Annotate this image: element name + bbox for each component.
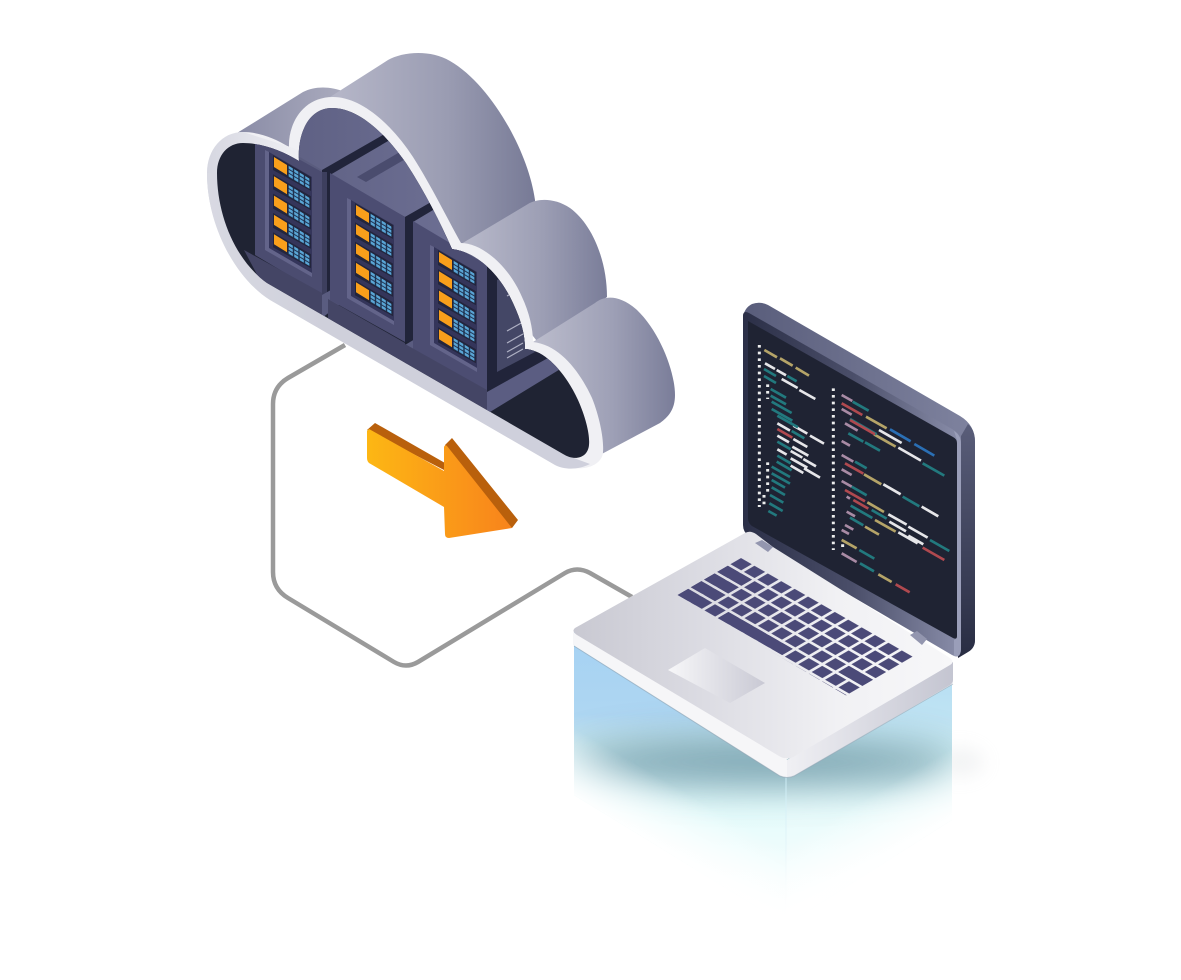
laptop screen xyxy=(743,303,975,658)
gold code tokens xyxy=(764,350,896,582)
blue code tokens xyxy=(890,429,934,456)
cloud with servers xyxy=(200,53,675,470)
server 2 xyxy=(328,137,480,365)
laptop base top deck xyxy=(573,532,952,758)
line numbers xyxy=(759,345,843,550)
server 3 side panel with vent lines xyxy=(497,279,535,372)
cloud front rim xyxy=(207,97,603,469)
shadow to the right of the glow box xyxy=(936,747,984,777)
illustration: cloud servers connected to laptop xyxy=(207,53,975,880)
white code tokens xyxy=(765,363,938,544)
server 3 xyxy=(405,210,559,412)
screen bezel xyxy=(743,312,961,656)
cloud interior with server racks xyxy=(217,108,590,458)
teal code tokens xyxy=(764,369,949,571)
laptop xyxy=(573,303,975,778)
server 1 xyxy=(244,92,395,318)
cloud depth lobes xyxy=(237,53,675,456)
connecting cable xyxy=(273,345,632,666)
screen back rim xyxy=(743,303,975,658)
orange download arrow xyxy=(367,423,518,538)
glow box under laptop xyxy=(574,632,952,880)
screen display xyxy=(748,321,957,639)
trackpad xyxy=(668,648,765,703)
code lines xyxy=(759,345,949,592)
mauve code tokens xyxy=(842,395,858,562)
keyboard xyxy=(675,557,914,696)
hinge tabs xyxy=(755,540,927,645)
red code tokens xyxy=(777,403,944,592)
laptop base thickness xyxy=(573,632,953,778)
